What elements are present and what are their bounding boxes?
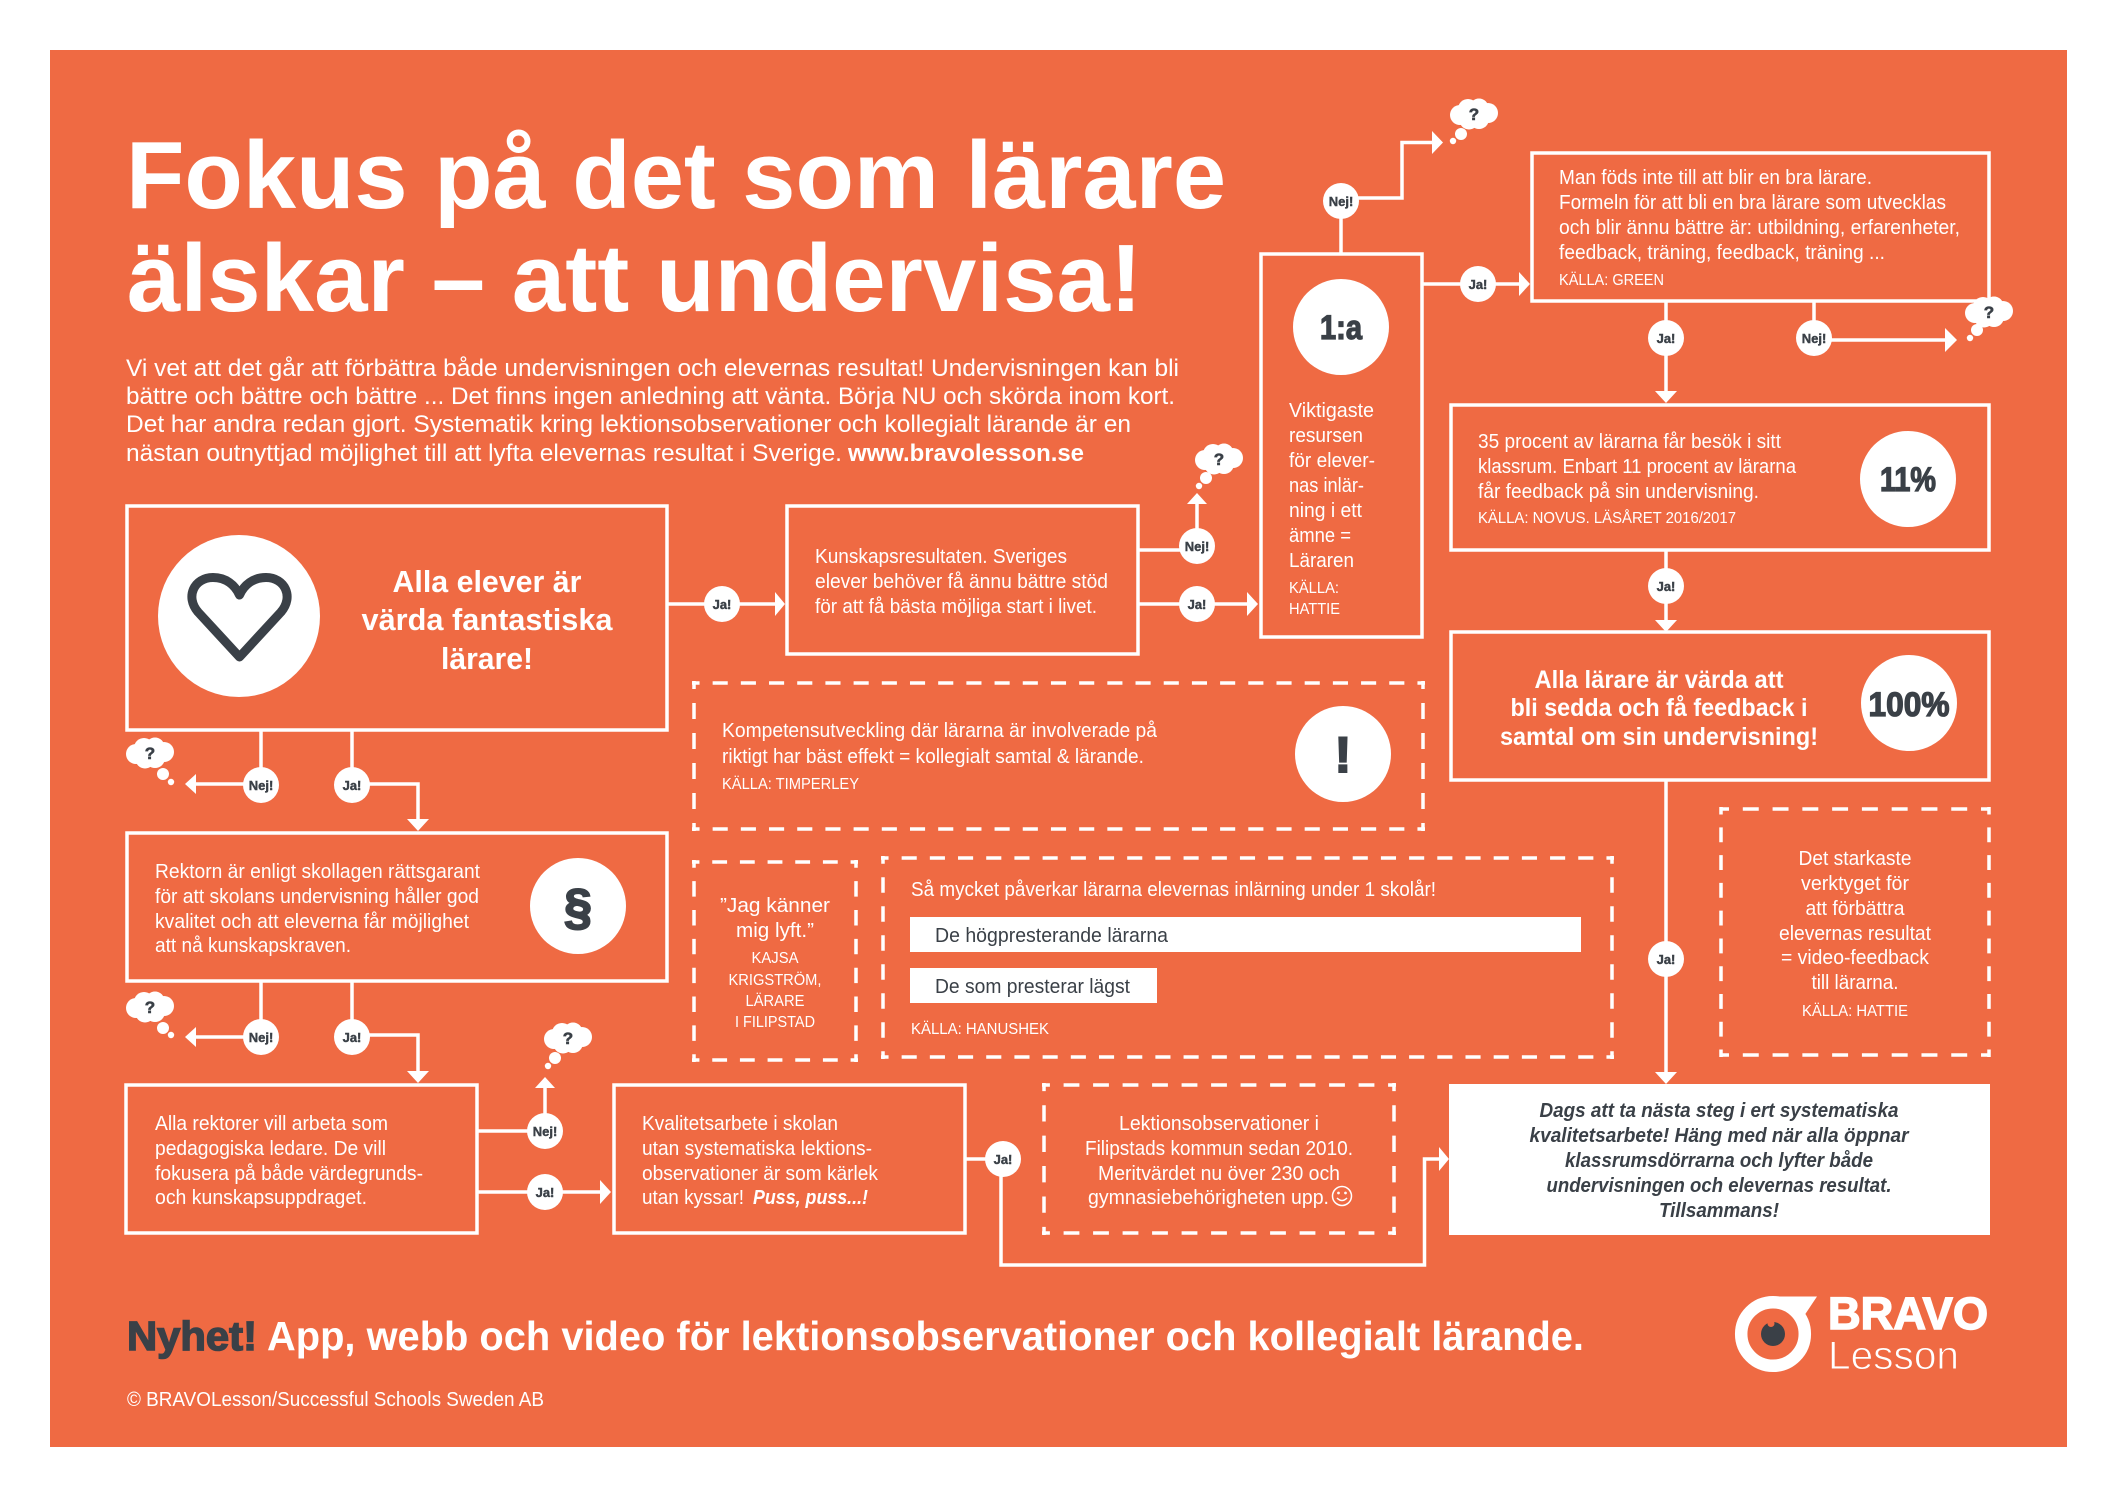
heading: alla elever: Alla elever är bbox=[392, 564, 582, 599]
panel: man föds inte till: Formeln för att bli en bra lärare som utvecklas bbox=[1559, 192, 1946, 214]
icon: eye bbox=[1741, 1296, 1817, 1366]
intro paragraph: Det har andra redan gjort. Systematik kring lektionsobservationer och kollegialt lärande är en bbox=[126, 411, 1131, 438]
badge: 100% bbox=[1861, 655, 1957, 751]
icon: thought cloud: ? bbox=[145, 998, 155, 1017]
panel: dags att ta nästa steg: undervisningen och elevernas resultat. bbox=[1546, 1175, 1892, 1197]
ja arrow to 100% bbox=[1648, 550, 1684, 632]
panel: 11 procent: klassrum. Enbart 11 procent av lärarna bbox=[1478, 456, 1797, 478]
panel: kvalitetsarbete: utan systematiska lektions- bbox=[642, 1138, 872, 1160]
nej branch from 1:a bbox=[1323, 98, 1498, 254]
nej branch from 1:a: Nej! bbox=[1329, 194, 1353, 209]
panel: 11 procent bbox=[1451, 405, 1989, 550]
ja arrow to final box bbox=[1648, 780, 1684, 1084]
logo: bravo lesson bbox=[1741, 1288, 1988, 1378]
icon: thought cloud bbox=[1965, 296, 2013, 341]
arrow: elever to kunskap: Ja! bbox=[713, 597, 731, 612]
arrow: kvalitetsarbete to final box bbox=[965, 1141, 1449, 1265]
panel: alla rektorer: och kunskapsuppdraget. bbox=[155, 1187, 367, 1209]
panel: quote: KAJSA bbox=[752, 950, 799, 967]
arrow: elever to kunskap bbox=[667, 586, 785, 622]
ja branch from kunskap bbox=[1138, 586, 1258, 622]
nej branch from green: Nej! bbox=[1802, 331, 1826, 346]
badge: 1:a: 1:a bbox=[1320, 309, 1363, 347]
ja branch from green: Ja! bbox=[1657, 331, 1675, 346]
panel: alla lärare är värda: samtal om sin undervisning! bbox=[1500, 723, 1818, 751]
intro paragraph bbox=[126, 355, 1179, 467]
panel: bar chart teachers effect: Så mycket påverkar lärarna elevernas inlärning under 1 skolår! bbox=[911, 879, 1436, 901]
intro paragraph: bättre och bättre och bättre ... Det finns ingen anledning att vänta. Börja NU och skörda inom kort. bbox=[126, 383, 1175, 410]
icon: thought cloud bbox=[1450, 98, 1498, 144]
badge: 1:a bbox=[1293, 279, 1389, 375]
heading: alla elever: värda fantastiska bbox=[362, 602, 613, 637]
panel: man föds inte till bbox=[1532, 153, 1989, 301]
panel: man föds inte till: och blir ännu bättre är: utbildning, erfarenheter, bbox=[1559, 217, 1960, 239]
ja branch from rektorn bbox=[334, 981, 429, 1083]
heading: alla elever bbox=[362, 564, 613, 676]
panel: kvalitetsarbete: observationer är som kärlek bbox=[642, 1163, 879, 1185]
panel: alla rektorer: Alla rektorer vill arbeta som bbox=[155, 1113, 388, 1135]
icon: thought cloud: ? bbox=[1984, 303, 1994, 322]
panel: rektorn: att nå kunskapskraven. bbox=[155, 935, 351, 957]
logo: bravo lesson: BRAVO bbox=[1828, 1288, 1988, 1339]
badge: exclamation bbox=[1295, 706, 1391, 802]
panel: quote bbox=[692, 860, 858, 1062]
panel: kvalitetsarbete bbox=[614, 1085, 965, 1233]
panel: rektorn: Rektorn är enligt skollagen rättsgarant bbox=[155, 861, 480, 883]
ja arrow to 100%: Ja! bbox=[1657, 579, 1675, 594]
logo: bravo lesson: Lesson bbox=[1828, 1334, 1959, 1378]
panel: alla lärare är värda: bli sedda och få feedback i bbox=[1510, 694, 1808, 722]
panel: 11 procent: 35 procent av lärarna får besök i sitt bbox=[1478, 431, 1781, 453]
icon: thought cloud bbox=[126, 738, 174, 785]
bar: low performers bbox=[910, 968, 1157, 1003]
footer headline: Nyhet! bbox=[127, 1313, 257, 1359]
badge: 100%: 100% bbox=[1868, 686, 1950, 724]
panel: kompetensutveckling bbox=[692, 681, 1425, 831]
badge: paragraph sign bbox=[530, 858, 626, 954]
panel: det starkaste verktyget: elevernas resultat bbox=[1779, 923, 1931, 945]
panel: 1:a viktigaste resursen: ämne = bbox=[1289, 525, 1351, 547]
panel: 1:a viktigaste resursen: KÄLLA: bbox=[1289, 579, 1339, 597]
arrow: kvalitetsarbete to final box: Ja! bbox=[994, 1152, 1012, 1167]
ja branch from kunskap: Ja! bbox=[1188, 597, 1206, 612]
panel: lektionsobservationer filipstad: Filipstads kommun sedan 2010. bbox=[1085, 1138, 1353, 1160]
nej branch from kunskap bbox=[1138, 444, 1243, 564]
panel: bar chart teachers effect bbox=[881, 856, 1614, 1059]
panel: 1:a viktigaste resursen: för elever- bbox=[1289, 450, 1375, 472]
panel: lektionsobservationer filipstad: Meritvärdet nu över 230 och bbox=[1098, 1163, 1340, 1185]
panel: dags att ta nästa steg bbox=[1449, 1084, 1990, 1235]
panel: kompetensutveckling: Kompetensutveckling där lärarna är involverade på bbox=[722, 720, 1158, 742]
ja arrow to final box: Ja! bbox=[1657, 952, 1675, 967]
panel: det starkaste verktyget: Det starkaste bbox=[1798, 848, 1912, 870]
panel: alla rektorer: pedagogiska ledare. De vill bbox=[155, 1138, 386, 1160]
panel: dags att ta nästa steg: Dags att ta nästa steg i ert systematiska bbox=[1540, 1100, 1898, 1122]
panel: 1:a viktigaste resursen: nas inlär- bbox=[1289, 475, 1364, 497]
footer headline: App, webb och video för lektionsobservationer och kollegialt lärande. bbox=[267, 1313, 1584, 1359]
bar: high performers: De högpresterande lärarna bbox=[935, 925, 1169, 947]
panel: rektorn bbox=[127, 833, 667, 981]
panel: det starkaste verktyget: KÄLLA: HATTIE bbox=[1802, 1002, 1908, 1020]
panel: 1:a viktigaste resursen: HATTIE bbox=[1289, 601, 1340, 618]
panel: det starkaste verktyget: verktyget för bbox=[1801, 873, 1909, 895]
panel: kompetensutveckling: KÄLLA: TIMPERLEY bbox=[722, 775, 859, 793]
ja branch from rektorn: Ja! bbox=[343, 1030, 361, 1045]
panel: alla lärare är värda bbox=[1451, 632, 1989, 780]
bar: low performers: De som presterar lägst bbox=[935, 976, 1130, 998]
panel: kunskapsresultaten: Kunskapsresultaten. Sveriges bbox=[815, 546, 1067, 568]
intro paragraph: nästan outnyttjad möjlighet till att lyfta elevernas resultat i Sverige. bbox=[126, 440, 842, 467]
panel: alla elever bbox=[127, 506, 667, 730]
icon: smiley bbox=[1332, 1186, 1352, 1206]
nej branch from rektorer bbox=[477, 1022, 592, 1149]
panel: rektorn: för att skolans undervisning håller god bbox=[155, 886, 479, 908]
nej branch from rektorn bbox=[126, 981, 279, 1055]
panel: kompetensutveckling: riktigt har bäst effekt = kollegialt samtal & lärande. bbox=[722, 746, 1144, 768]
panel: alla rektorer bbox=[126, 1085, 477, 1233]
ja branch from 1:a bbox=[1422, 266, 1530, 302]
badge: paragraph sign: § bbox=[564, 879, 592, 935]
panel: kunskapsresultaten: för att få bästa möjliga start i livet. bbox=[815, 596, 1097, 618]
icon: thought cloud: ? bbox=[145, 744, 155, 763]
panel: det starkaste verktyget: till lärarna. bbox=[1812, 972, 1898, 994]
ja branch from rektorer: Ja! bbox=[536, 1185, 554, 1200]
panel: bar chart teachers effect: KÄLLA: HANUSHEK bbox=[911, 1020, 1049, 1038]
panel: dags att ta nästa steg: Tillsammans! bbox=[1659, 1200, 1779, 1222]
ja branch from elever bbox=[334, 730, 429, 831]
icon: heart bbox=[158, 535, 320, 697]
panel: 11 procent: får feedback på sin undervisning. bbox=[1478, 481, 1759, 503]
nej branch from green bbox=[1796, 296, 2013, 356]
nej branch from rektorer: Nej! bbox=[533, 1124, 557, 1139]
panel: dags att ta nästa steg: klassrumsdörrarna och lyfter både bbox=[1565, 1149, 1873, 1172]
nej branch from rektorn: Nej! bbox=[249, 1030, 273, 1045]
panel: rektorn: kvalitet och att eleverna får möjlighet bbox=[155, 911, 469, 933]
badge: exclamation: ! bbox=[1335, 727, 1351, 783]
ja branch from elever: Ja! bbox=[343, 778, 361, 793]
panel: quote: ”Jag känner bbox=[720, 895, 830, 917]
panel: alla rektorer: fokusera på både värdegrunds- bbox=[155, 1163, 423, 1185]
panel: 1:a viktigaste resursen: Läraren bbox=[1289, 550, 1354, 572]
panel: 1:a viktigaste resursen: ning i ett bbox=[1289, 500, 1362, 522]
panel: quote: LÄRARE bbox=[746, 992, 804, 1010]
panel: quote: KRIGSTRÖM, bbox=[728, 971, 822, 989]
panel: 1:a viktigaste resursen bbox=[1261, 254, 1422, 637]
panel: lektionsobservationer filipstad: gymnasiebehörigheten upp. bbox=[1088, 1187, 1329, 1209]
icon: thought cloud: ? bbox=[1214, 450, 1224, 469]
icon: thought cloud: ? bbox=[1469, 105, 1479, 124]
panel: kunskapsresultaten: elever behöver få ännu bättre stöd bbox=[815, 571, 1108, 593]
panel: kunskapsresultaten bbox=[787, 506, 1138, 654]
title bbox=[126, 122, 1226, 332]
panel: man föds inte till: feedback, träning, feedback, träning ... bbox=[1559, 242, 1885, 264]
ja branch from rektorer bbox=[477, 1174, 611, 1210]
panel: det starkaste verktyget bbox=[1721, 807, 1989, 1057]
ja branch from green bbox=[1648, 301, 1684, 403]
panel: man föds inte till: Man föds inte till att blir en bra lärare. bbox=[1559, 167, 1872, 189]
copyright: © BRAVOLesson/Successful Schools Sweden AB bbox=[127, 1389, 544, 1411]
badge: 11% bbox=[1860, 431, 1956, 527]
nej branch from kunskap: Nej! bbox=[1185, 539, 1209, 554]
panel: 11 procent: KÄLLA: NOVUS. LÄSÅRET 2016/2017 bbox=[1478, 508, 1736, 527]
panel: dags att ta nästa steg: kvalitetsarbete! Häng med när alla öppnar bbox=[1530, 1125, 1910, 1147]
intro paragraph: Vi vet att det går att förbättra både undervisningen och elevernas resultat! Undervisningen kan bli bbox=[126, 355, 1179, 382]
panel: man föds inte till: KÄLLA: GREEN bbox=[1559, 271, 1664, 289]
title: Fokus på det som lärare bbox=[126, 122, 1226, 229]
icon: thought cloud bbox=[126, 992, 174, 1038]
ja branch from 1:a: Ja! bbox=[1469, 277, 1487, 292]
intro paragraph: www.bravolesson.se bbox=[847, 440, 1084, 467]
panel: quote: I FILIPSTAD bbox=[735, 1014, 815, 1031]
nej branch from elever bbox=[126, 730, 279, 803]
panel: kvalitetsarbete: Puss, puss...! bbox=[753, 1187, 868, 1209]
panel: lektionsobservationer filipstad bbox=[1042, 1083, 1396, 1235]
panel: quote: mig lyft.” bbox=[736, 920, 814, 942]
panel: lektionsobservationer filipstad: Lektionsobservationer i bbox=[1119, 1113, 1319, 1135]
bar: high performers bbox=[910, 917, 1581, 952]
icon: thought cloud: ? bbox=[563, 1029, 573, 1048]
panel: alla lärare är värda: Alla lärare är värda att bbox=[1534, 666, 1784, 694]
title: älskar – att undervisa! bbox=[127, 225, 1142, 332]
panel: det starkaste verktyget: att förbättra bbox=[1806, 898, 1905, 920]
panel: det starkaste verktyget: = video-feedback bbox=[1781, 947, 1930, 969]
panel: kvalitetsarbete: Kvalitetsarbete i skolan bbox=[642, 1113, 838, 1135]
nej branch from elever: Nej! bbox=[249, 778, 273, 793]
badge: 11%: 11% bbox=[1880, 461, 1936, 499]
panel: kvalitetsarbete: utan kyssar! bbox=[642, 1187, 744, 1209]
panel: 1:a viktigaste resursen: Viktigaste bbox=[1289, 400, 1374, 422]
panel: 1:a viktigaste resursen: resursen bbox=[1289, 425, 1363, 447]
heading: alla elever: lärare! bbox=[441, 641, 533, 676]
